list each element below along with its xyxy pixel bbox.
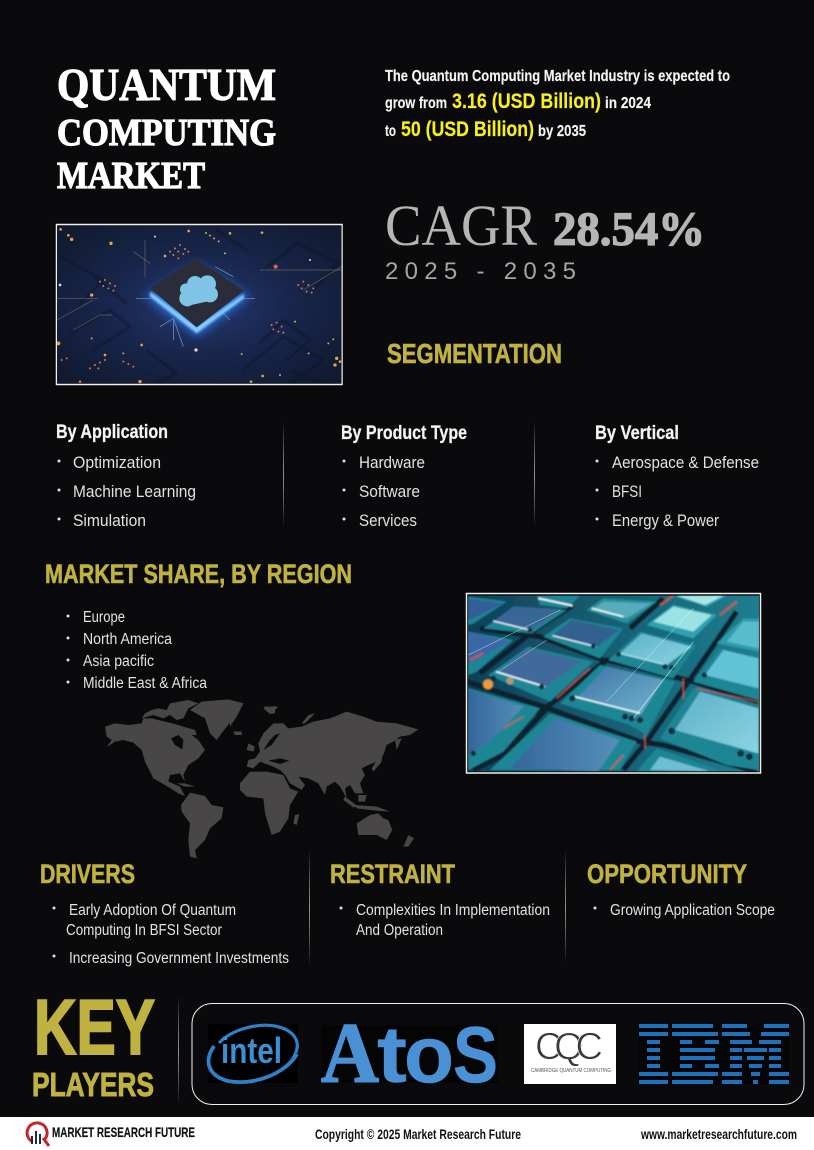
segment column: by application: Simulation — [73, 511, 146, 530]
title: MARKET — [57, 155, 205, 197]
opportunity: Growing Application Scope — [610, 902, 775, 919]
segment column: by product type: Hardware — [359, 453, 425, 472]
drivers: Early Adoption Of Quantum — [69, 902, 236, 919]
segment column: by vertical: Energy & Power — [612, 511, 719, 530]
footer — [0, 1117, 814, 1150]
forecast period: 2025 - 2035 — [385, 258, 576, 285]
drivers — [40, 859, 289, 967]
logo: Cambridge Quantum Computing: CAMBRIDGE QUANTUM COMPUTING — [531, 1068, 611, 1074]
segment column: by product type: Services — [359, 511, 417, 530]
segment column: by vertical — [595, 423, 759, 530]
market growth statement: 50 (USD Billion) — [401, 118, 534, 141]
CAGR figure — [385, 193, 705, 258]
market growth statement: The Quantum Computing Market Industry is expected to — [385, 68, 730, 85]
market growth statement: grow from — [385, 95, 447, 112]
logo: IBM — [639, 1024, 789, 1084]
heading: key players — [32, 983, 155, 1103]
key players logo panel — [192, 1004, 804, 1104]
drivers: Increasing Government Investments — [69, 950, 289, 967]
title: QUANTUM — [57, 60, 276, 110]
CAGR figure: 28.54% — [553, 203, 705, 256]
logo: Intel: intel — [221, 1030, 282, 1071]
logo: Atos: o — [404, 1010, 454, 1099]
CAGR figure: CAGR — [385, 193, 537, 258]
image: glowing cloud chip on circuit board — [56, 224, 342, 384]
logo: Atos: S — [453, 1010, 498, 1099]
market growth statement: 3.16 (USD Billion) — [452, 90, 601, 113]
segment column: by product type: By Product Type — [341, 423, 467, 444]
segment column: by application: By Application — [56, 422, 168, 443]
opportunity: OPPORTUNITY — [587, 859, 747, 889]
icon: Market Research Future logo — [27, 1123, 49, 1146]
segment column: by vertical: By Vertical — [595, 423, 679, 444]
segment column: by product type — [341, 423, 467, 530]
market growth statement: in 2024 — [605, 95, 651, 112]
region list: Europe — [83, 609, 125, 626]
world map — [105, 699, 418, 858]
footer: MARKET RESEARCH FUTURE — [52, 1124, 195, 1140]
logo: Atos: t — [377, 1010, 407, 1099]
restraint: RESTRAINT — [330, 859, 455, 889]
drivers: DRIVERS — [40, 859, 135, 889]
logo: Atos: A — [321, 1005, 379, 1101]
opportunity — [587, 859, 775, 919]
region list — [66, 609, 207, 692]
icon: cloud — [179, 275, 218, 306]
segment column: by vertical: BFSI — [612, 482, 642, 501]
footer: Copyright © 2025 Market Research Future — [315, 1126, 521, 1142]
logo: Cambridge Quantum Computing — [524, 1024, 616, 1084]
market growth statement: by 2035 — [538, 123, 586, 140]
drivers: Computing In BFSI Sector — [66, 922, 222, 939]
restraint: And Operation — [356, 922, 443, 939]
heading: market share by region: MARKET SHARE, BY REGION — [45, 559, 352, 589]
logo: Intel — [208, 1024, 298, 1083]
title — [57, 60, 276, 197]
segment column: by application — [56, 422, 196, 530]
image: quantum processor array — [463, 592, 763, 775]
restraint — [330, 859, 550, 939]
restraint: Complexities In Implementation — [356, 902, 550, 919]
segment column: by vertical: Aerospace & Defense — [612, 453, 759, 472]
heading: key players: KEY — [34, 983, 155, 1071]
logo: Atos — [321, 1005, 498, 1101]
region list: Asia pacific — [83, 653, 154, 670]
market growth statement: to — [385, 123, 396, 140]
heading: key players: PLAYERS — [32, 1066, 154, 1103]
segment column: by product type: Software — [359, 482, 420, 501]
region list: Middle East & Africa — [83, 675, 207, 692]
segment column: by application: Machine Learning — [73, 482, 196, 501]
segment column: by application: Optimization — [73, 453, 161, 472]
logo: Cambridge Quantum Computing: CQC — [535, 1026, 603, 1068]
market growth statement — [385, 68, 730, 141]
title: COMPUTING — [57, 112, 276, 154]
region list: North America — [83, 631, 172, 648]
heading: segmentation: SEGMENTATION — [387, 338, 562, 369]
